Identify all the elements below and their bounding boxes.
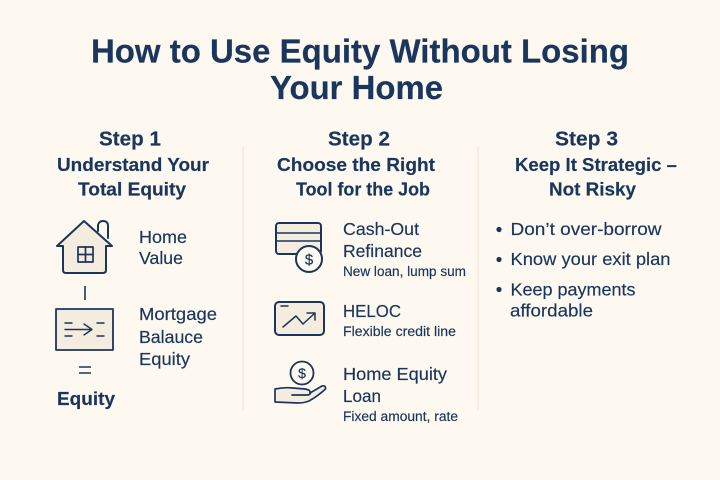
text: home equity loan: Fixed amount, rate — [343, 409, 458, 424]
text: home equity loan: Loan — [343, 386, 381, 406]
icon: card with dollar coin: $ — [305, 252, 314, 268]
heading: step 1: Total Equity — [78, 180, 186, 200]
text: home value: Home — [139, 227, 187, 247]
title: Your Home — [270, 69, 443, 106]
bullet list: Don’t over-borrow — [510, 219, 662, 239]
heading: step 3: Keep It Strategic – — [515, 155, 677, 175]
text: home value — [139, 227, 187, 268]
heading: step 3 — [515, 128, 677, 200]
bullet list: Know your exit plan — [510, 249, 670, 269]
text: cash-out refinance: Refinance — [343, 241, 422, 261]
heading: step 2 — [277, 128, 435, 200]
bullet list: affordable — [510, 300, 593, 320]
text: equity result: Equity — [57, 388, 116, 409]
heading: step 2: Tool for the Job — [296, 180, 430, 200]
heading: step 3: Not Risky — [549, 180, 636, 200]
title: How to Use Equity Without Losing — [91, 32, 629, 70]
icon: hand with coin: $ — [298, 365, 306, 381]
text: mortgage balance equity: Balauce — [139, 327, 203, 347]
text: cash-out refinance — [343, 219, 466, 279]
text: heloc: Flexible credit line — [343, 324, 456, 339]
heading: step 2: Choose the Right — [277, 155, 435, 175]
text: cash-out refinance: Cash-Out — [343, 219, 419, 239]
bullet list — [496, 219, 670, 320]
text: home equity loan: Home Equity — [343, 364, 447, 384]
heading: step 1: Understand Your — [57, 155, 209, 175]
icon: house — [57, 221, 112, 273]
text: mortgage balance equity: Mortgage — [139, 304, 217, 324]
panel: step 1 — [56, 128, 217, 409]
text: heloc — [343, 301, 456, 339]
heading: step 2: Step 2 — [328, 128, 390, 150]
heading: step 1: Step 1 — [99, 128, 161, 150]
heading: step 1 — [57, 128, 209, 200]
heading: step 3: Step 3 — [555, 128, 618, 150]
text: home equity loan — [343, 364, 458, 424]
bullet list: Keep payments — [510, 280, 636, 300]
title — [91, 32, 629, 106]
panel: step 3 — [496, 128, 677, 320]
icon: hand with coin — [275, 362, 326, 403]
icon: card with dollar coin — [276, 223, 322, 272]
panel: step 2 — [275, 128, 466, 424]
minus sign — [84, 286, 86, 300]
text: mortgage balance equity — [139, 304, 217, 369]
text: heloc: HELOC — [343, 301, 401, 321]
icon: chart card — [275, 302, 324, 335]
text: cash-out refinance: New loan, lump sum — [343, 264, 466, 279]
icon: mortgage document — [56, 309, 113, 350]
text: home value: Value — [139, 248, 183, 268]
text: mortgage balance equity: Equity — [139, 349, 190, 369]
equals sign — [79, 367, 91, 373]
